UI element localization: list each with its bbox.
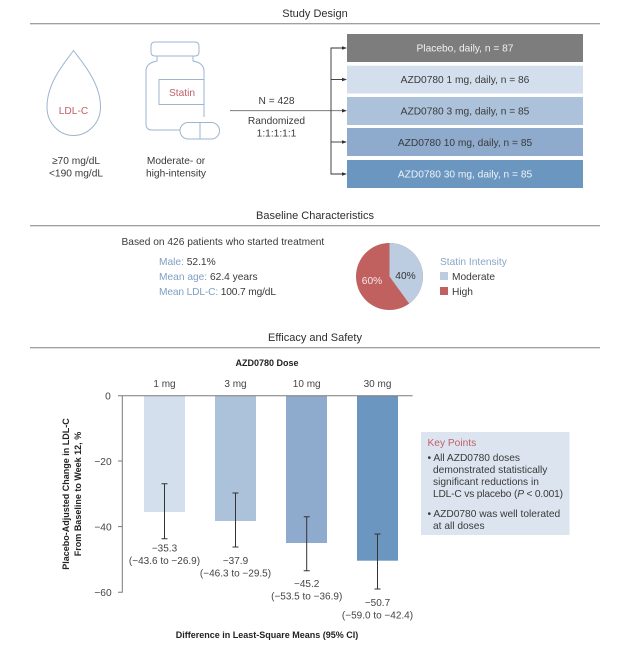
panel: efficacy and safety — [30, 332, 600, 640]
legend: statin intensity: High — [452, 287, 473, 298]
bar: 10 mg: 10 mg — [293, 379, 321, 390]
bar: 3 mg: 3 mg — [224, 379, 247, 390]
text: LDL-C criteria: <190 mg/dL — [49, 168, 103, 180]
bar: 30 mg: −50.7 — [365, 598, 390, 609]
text: randomization: Randomized — [248, 116, 305, 127]
box: 1 mg arm: AZD0780 1 mg, daily, n = 86 — [401, 75, 530, 86]
callout: key points: • All AZD0780 doses — [428, 453, 520, 464]
bar: 10 mg — [271, 379, 342, 602]
pie chart: statin intensity — [356, 243, 423, 310]
icon: LDL-C drop — [47, 50, 100, 136]
callout: key points: at all doses — [433, 521, 485, 532]
y axis tick labels: 0 — [105, 392, 111, 402]
bar: 3 mg: −37.9 — [223, 556, 248, 567]
bar: 1 mg — [129, 379, 200, 567]
y axis tick labels: −20 — [94, 457, 112, 468]
callout: key points: demonstrated statistically — [433, 465, 548, 476]
bar chart: LDL-C change by dose — [61, 379, 413, 621]
text: randomization: 1:1:1:1:1 — [257, 128, 297, 140]
icon: statin bottle and pill: Statin — [169, 88, 195, 99]
callout: key points: Key Points — [428, 438, 476, 449]
box: 3 mg arm — [347, 97, 583, 125]
legend: statin intensity — [440, 257, 508, 298]
y axis title: Placebo-Adjusted Change in LDL-C — [61, 418, 71, 570]
icon: LDL-C drop: LDL-C — [59, 106, 88, 117]
icon: statin bottle and pill — [146, 42, 220, 139]
bar: 3 mg — [200, 379, 271, 579]
heading: baseline characteristics: Baseline Characteristics — [256, 210, 374, 222]
bar: 1 mg: (−43.6 to −26.9) — [129, 556, 200, 567]
text: male share: Male: 52.1% — [159, 257, 216, 268]
y axis tick labels: −60 — [94, 588, 112, 599]
bar: 1 mg: 1 mg — [153, 379, 176, 390]
callout: key points: LDL-C vs placebo (P < 0.001) — [433, 489, 563, 500]
bar: 10 mg: −45.2 — [294, 579, 319, 590]
box: placebo arm: Placebo, daily, n = 87 — [417, 44, 514, 54]
text: randomization: N = 428 — [259, 96, 295, 107]
text: statin criteria: Moderate- or — [147, 156, 205, 167]
box: 30 mg arm — [347, 160, 583, 188]
box: 10 mg arm — [347, 128, 583, 156]
panel: baseline characteristics — [30, 210, 600, 310]
callout: key points: • AZD0780 was well tolerated — [428, 509, 561, 520]
bar: 10 mg: (−53.5 to −36.9) — [271, 591, 342, 602]
chart title: dose: AZD0780 Dose — [235, 358, 299, 368]
callout: key points — [421, 432, 570, 535]
axes — [118, 396, 413, 592]
text: mean age: Mean age: 62.4 years — [159, 272, 258, 283]
bar: 30 mg: 30 mg — [364, 379, 391, 390]
pie chart: statin intensity: 60% — [362, 276, 382, 287]
callout: key points: significant reductions in — [433, 477, 539, 488]
heading: efficacy and safety: Efficacy and Safety — [268, 332, 362, 344]
heading: study design: Study Design — [282, 8, 348, 20]
box: 10 mg arm: AZD0780 10 mg, daily, n = 85 — [398, 138, 532, 149]
arrows: randomization branches — [230, 46, 347, 176]
bar: 30 mg: (−59.0 to −42.4) — [342, 610, 413, 621]
legend: statin intensity: Moderate — [452, 272, 495, 283]
text: LDL-C criteria: ≥70 mg/dL — [52, 156, 100, 167]
box: 1 mg arm — [347, 66, 583, 94]
box: 30 mg arm: AZD0780 30 mg, daily, n = 85 — [398, 170, 532, 180]
bar: 30 mg — [342, 379, 413, 621]
y axis tick labels — [94, 392, 112, 599]
text: patient count: Based on 426 patients who started treatment — [122, 237, 324, 248]
box: placebo arm — [347, 34, 583, 62]
y axis title: From Baseline to Week 12, % — [73, 432, 83, 556]
panel: study design — [30, 8, 600, 188]
text: mean LDL-C: Mean LDL-C: 100.7 mg/dL — [159, 287, 276, 298]
legend: statin intensity: Statin Intensity — [440, 257, 508, 268]
pie chart: statin intensity: 40% — [395, 271, 416, 282]
x axis caption: Difference in Least-Square Means (95% CI) — [176, 630, 358, 640]
y axis tick labels: −40 — [94, 522, 112, 534]
text: randomization — [248, 96, 305, 140]
bar: 3 mg: (−46.3 to −29.5) — [200, 568, 271, 579]
bar: 1 mg: −35.3 — [152, 544, 177, 554]
text: statin criteria: high-intensity — [146, 168, 207, 180]
box: 3 mg arm: AZD0780 3 mg, daily, n = 85 — [401, 106, 530, 118]
